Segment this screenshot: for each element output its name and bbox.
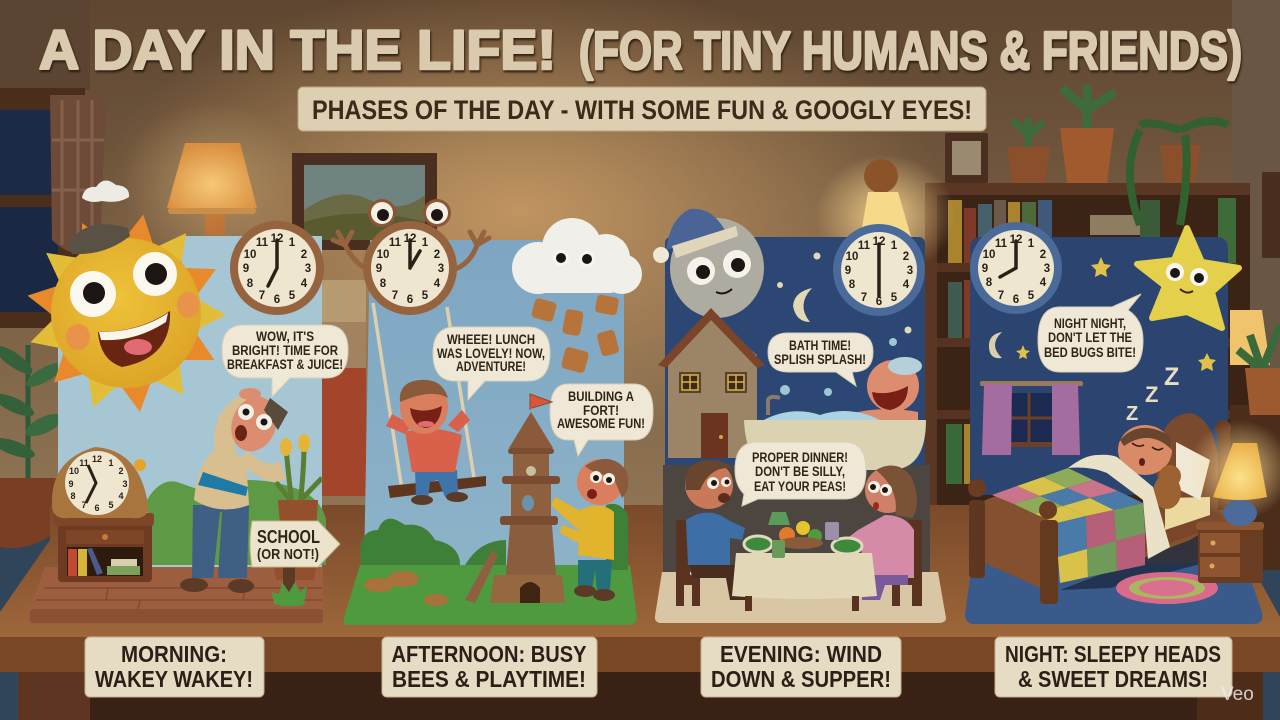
night clock 8:00 (970, 222, 1062, 314)
grey step (663, 465, 930, 575)
mother (845, 466, 917, 600)
wall corner right (1232, 0, 1280, 410)
speech bubble: fort: BUILDING A (568, 389, 634, 404)
background: window and curtain (0, 88, 106, 328)
evening clock 6:00: 5 (891, 292, 898, 304)
desk clock on cabinet: 2 (118, 466, 124, 476)
morning base (28, 567, 323, 624)
night stars and moon (989, 257, 1216, 371)
morning backdrop (58, 236, 322, 570)
mattress (1165, 497, 1210, 530)
sign: school: (OR NOT!) (257, 546, 319, 563)
sun character (25, 212, 226, 414)
night clock 8:00: 4 (1040, 277, 1047, 289)
night backdrop (970, 237, 1228, 495)
rug (1116, 572, 1218, 604)
speech bubble: fort (550, 384, 653, 456)
speech bubble: night (1038, 294, 1143, 372)
background: couch (322, 280, 366, 496)
speech bubble: bath: BATH TIME! (789, 338, 851, 353)
nightstand (1196, 522, 1264, 583)
morning clock 7:00: 12 (271, 233, 283, 245)
moon character (653, 209, 764, 318)
morning clock 7:00: 2 (301, 249, 307, 261)
morning clock 7:00: 8 (247, 278, 254, 290)
afternoon clock 1:00 with eyes and arms: 12 (404, 233, 416, 245)
evening clock 6:00: 9 (845, 265, 851, 277)
night label: & SWEET DREAMS! (1018, 666, 1208, 692)
bedside lamp (1188, 420, 1280, 526)
background: items on shelf top (945, 85, 1280, 258)
bathtub with bather (744, 338, 926, 470)
evening clock 6:00: 11 (858, 240, 871, 252)
sleeping Z letters: Z (1145, 382, 1158, 407)
swing ropes (373, 303, 475, 490)
hills (147, 480, 326, 565)
speech bubble: lunch: WAS LOVELY! NOW, (437, 346, 545, 361)
night base (965, 563, 1262, 624)
desk clock on cabinet: 3 (122, 479, 128, 489)
evening clock 6:00: 1 (891, 240, 898, 252)
dinner table scene (676, 460, 922, 611)
desk clock on cabinet: 10 (69, 466, 79, 476)
evening label: DOWN & SUPPER! (711, 666, 891, 692)
flower pot (272, 434, 322, 580)
night clock 8:00: 3 (1044, 263, 1050, 275)
turned-back sheet (1068, 455, 1170, 559)
evening clock 6:00: 4 (903, 279, 910, 291)
floor (0, 505, 1280, 720)
afternoon clock 1:00 with eyes and arms: 10 (377, 249, 389, 261)
morning clock 7:00: 7 (259, 290, 265, 302)
night label: NIGHT: SLEEPY HEADS (1005, 641, 1221, 667)
panel: evening (653, 209, 946, 623)
morning label (85, 637, 264, 697)
afternoon backdrop (364, 240, 624, 570)
morning clock 7:00: 6 (274, 294, 280, 306)
desk clock on cabinet: 7 (81, 500, 87, 510)
evening clock 6:00: 2 (903, 251, 909, 263)
desk clock on cabinet: 12 (92, 454, 102, 464)
night clock 8:00: 9 (982, 263, 988, 275)
background: landscape picture (292, 153, 437, 250)
afternoon clock 1:00 with eyes and arms: 3 (438, 263, 444, 275)
wooden table (0, 505, 1280, 720)
speech bubble: breakfast: BRIGHT! TIME FOR (232, 343, 338, 358)
morning clock 7:00: 10 (244, 249, 256, 261)
subtitle banner: PHASES OF THE DAY - WITH SOME FUN & GOOGLY EYES! (312, 95, 972, 125)
speech bubble: dinner: DON'T BE SILLY, (755, 464, 845, 479)
title (39, 18, 1242, 81)
sign: school (250, 521, 340, 606)
speech bubble: night: BED BUGS BITE! (1044, 345, 1136, 360)
morning clock 7:00: 5 (289, 290, 296, 302)
evening backdrop (665, 237, 925, 477)
afternoon clock 1:00 with eyes and arms: 1 (422, 237, 429, 249)
bed posts (969, 500, 985, 578)
headboard (1157, 413, 1220, 520)
evening clock 6:00: 3 (907, 265, 913, 277)
window with curtains (980, 381, 1083, 455)
background: right cabinet, lamp and plant (1230, 310, 1280, 570)
night clock 8:00: 10 (983, 249, 995, 261)
sleeping head (1118, 425, 1172, 475)
sign: school: SCHOOL (257, 527, 320, 547)
bed side (1145, 520, 1200, 552)
afternoon label: BEES & PLAYTIME! (392, 666, 586, 692)
watermark: Veo (1221, 684, 1254, 705)
speech bubble: fort: FORT! (583, 403, 619, 418)
afternoon clock 1:00 with eyes and arms: 7 (392, 290, 398, 302)
building child (551, 459, 628, 601)
afternoon label (382, 637, 597, 697)
night clock 8:00: 12 (1010, 234, 1022, 246)
speech bubble: lunch: ADVENTURE! (456, 359, 526, 374)
panel: afternoon (333, 199, 653, 625)
background: wall sconce (815, 155, 955, 275)
desk clock on cabinet (52, 447, 154, 582)
waking person (180, 388, 288, 593)
speech bubble: night: NIGHT NIGHT, (1054, 316, 1126, 331)
evening base mat (655, 572, 946, 623)
sleeping Z letters (1126, 363, 1179, 425)
sleeping Z letters: Z (1164, 363, 1179, 391)
background: table lamp (122, 100, 302, 260)
afternoon clock 1:00 with eyes and arms: 6 (407, 294, 413, 306)
night clock 8:00: 1 (1028, 238, 1035, 250)
stars and crescent (777, 252, 912, 334)
afternoon clock 1:00 with eyes and arms: 9 (376, 263, 382, 275)
night clock 8:00: 5 (1028, 290, 1035, 302)
title: A DAY IN THE LIFE! (39, 18, 556, 81)
afternoon label: AFTERNOON: BUSY (392, 641, 586, 667)
speech bubble: lunch: WHEEE! LUNCH (447, 332, 535, 347)
night clock 8:00: 6 (1013, 294, 1019, 306)
morning label: MORNING: (121, 641, 227, 667)
morning label: WAKEY WAKEY! (95, 666, 253, 692)
afternoon clock 1:00 with eyes and arms: 8 (380, 278, 387, 290)
night clock 8:00: 8 (986, 277, 993, 289)
pillow (1176, 442, 1210, 500)
bushes (360, 504, 628, 570)
morning clock 7:00: 4 (301, 278, 308, 290)
bed (968, 413, 1231, 604)
speech bubble: bath (768, 333, 873, 386)
patchwork quilt (992, 468, 1145, 583)
speech bubble: breakfast: WOW, IT'S (256, 329, 314, 344)
morning clock 7:00: 11 (256, 237, 269, 249)
afternoon clock 1:00 with eyes and arms: 11 (389, 237, 402, 249)
desk clock on cabinet: 6 (94, 503, 100, 513)
speech bubble: night: DON'T LET THE (1048, 330, 1132, 345)
wall lamp glow (90, 0, 950, 440)
evening clock 6:00: 8 (849, 279, 856, 291)
desk clock on cabinet: 8 (70, 491, 76, 501)
father (685, 460, 745, 600)
subtitle banner (298, 87, 986, 131)
speech bubble: breakfast (222, 325, 348, 397)
teddy bear (1153, 465, 1181, 509)
desk clock on cabinet: 11 (79, 458, 89, 468)
cloud character with cookie rain (512, 218, 642, 374)
panel: night (965, 222, 1280, 624)
morning clock 7:00: 1 (289, 237, 296, 249)
night clock 8:00: 11 (995, 238, 1008, 250)
speech bubble: dinner (735, 442, 866, 506)
speech bubble: lunch (433, 327, 550, 400)
evening clock 6:00: 6 (876, 296, 882, 308)
sleeping Z letters: Z (1126, 403, 1138, 425)
night clock 8:00: 7 (998, 290, 1004, 302)
desk clock on cabinet: 5 (108, 500, 114, 510)
afternoon grass base (344, 565, 637, 625)
house (658, 308, 765, 458)
afternoon clock 1:00 with eyes and arms (333, 199, 489, 315)
morning clock 7:00: 9 (243, 263, 249, 275)
desk clock on cabinet: 1 (108, 458, 114, 468)
evening clock 6:00: 7 (861, 292, 867, 304)
under bed shadow (1060, 525, 1215, 590)
evening clock 6:00: 12 (873, 236, 885, 248)
food (744, 536, 772, 552)
night label (995, 637, 1232, 697)
chairs (676, 520, 700, 606)
desk clock on cabinet: 9 (68, 479, 74, 489)
evening clock 6:00 (833, 224, 925, 316)
speech bubble: breakfast: BREAKFAST & JUICE! (227, 357, 343, 372)
table (732, 553, 877, 599)
star character (1137, 228, 1239, 328)
afternoon clock 1:00 with eyes and arms: 5 (422, 290, 429, 302)
afternoon clock 1:00 with eyes and arms: 4 (434, 278, 441, 290)
sand tower with flag (465, 394, 565, 603)
background: bookshelf with books (925, 183, 1250, 505)
small cloud decoration (82, 180, 129, 202)
wall corner left (0, 0, 90, 90)
cookies on grass (364, 571, 448, 606)
morning clock 7:00: 3 (305, 263, 311, 275)
afternoon clock 1:00 with eyes and arms: 2 (434, 249, 440, 261)
night clock 8:00: 2 (1040, 249, 1046, 261)
footboard (978, 496, 1056, 595)
morning clock 7:00 (230, 221, 324, 315)
panel: morning (25, 212, 348, 624)
desk clock on cabinet: 4 (118, 491, 124, 501)
speech bubble: dinner: EAT YOUR PEAS! (754, 479, 846, 494)
background: potted plant left (0, 342, 66, 548)
speech bubble: bath: SPLISH SPLASH! (774, 352, 866, 367)
evening clock 6:00: 10 (846, 251, 858, 263)
speech bubble: dinner: PROPER DINNER! (752, 450, 848, 465)
speech bubble: fort: AWESOME FUN! (557, 416, 645, 431)
evening label: EVENING: WIND (720, 641, 882, 667)
evening label (701, 637, 901, 697)
background: wall (0, 0, 1280, 510)
swinging child (386, 380, 486, 505)
